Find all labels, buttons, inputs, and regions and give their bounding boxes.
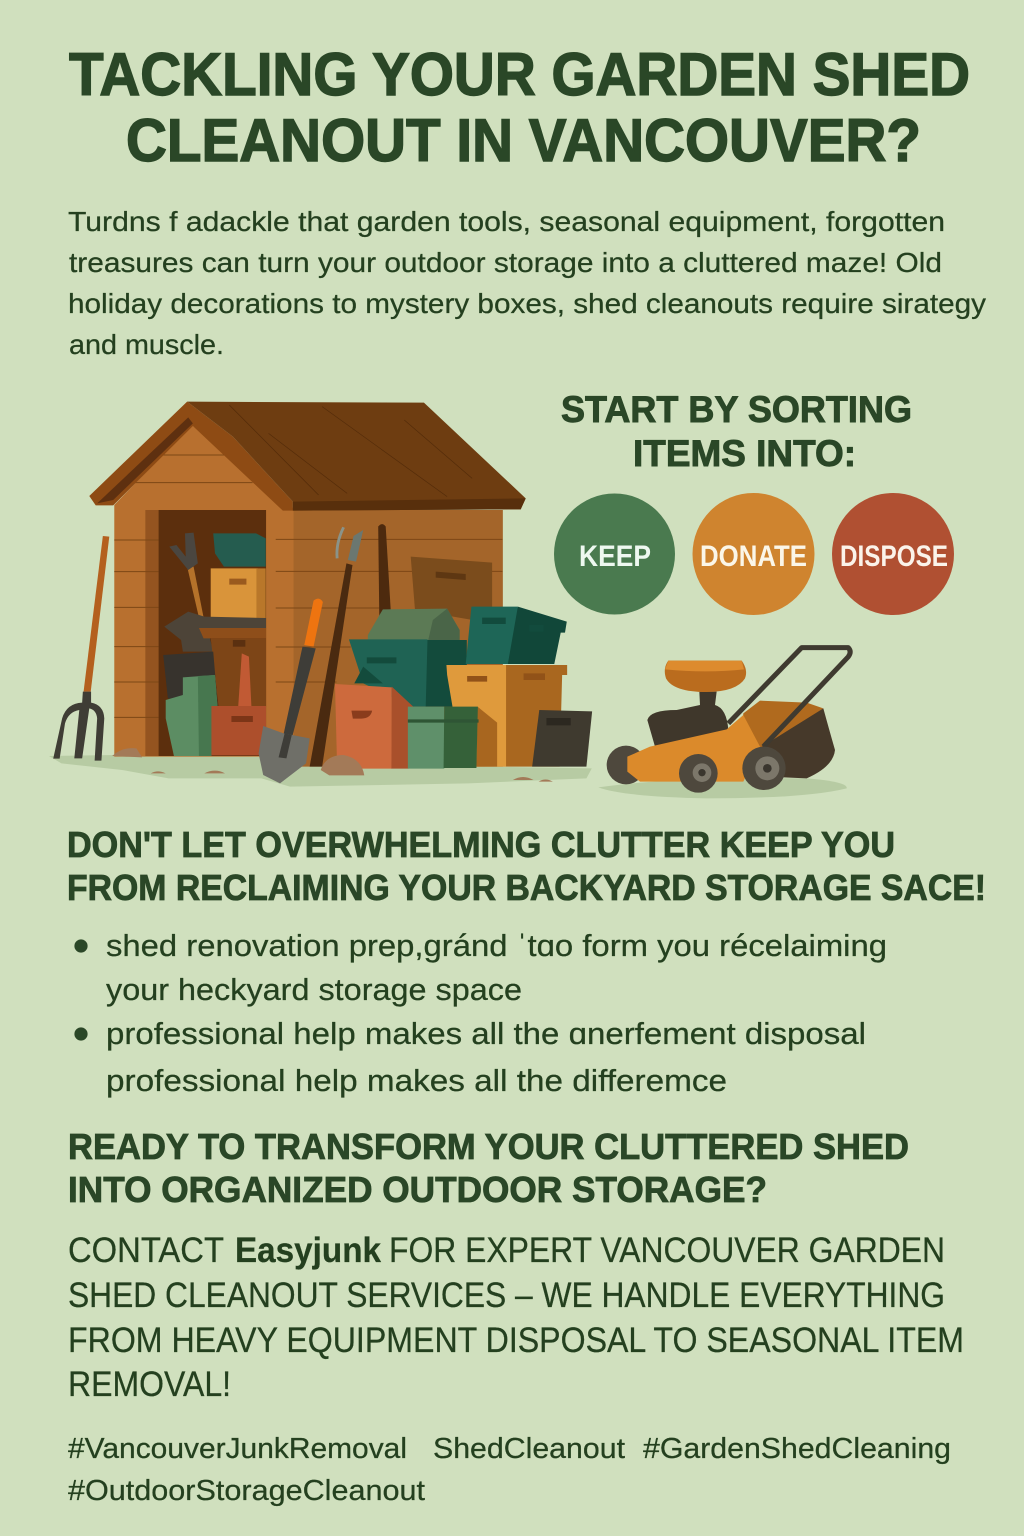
siding lines xyxy=(114,455,502,717)
heading: ready to transform: READY TO TRANSFORM YOUR CLUTTERED SHED xyxy=(68,1126,909,1167)
shed front wall xyxy=(114,425,294,757)
badge: keep xyxy=(554,494,675,614)
grass bag xyxy=(740,701,823,757)
heading: start by sorting xyxy=(561,389,912,474)
intro paragraph: holiday decorations to mystery boxes, shed cleanouts require sirategy xyxy=(68,288,986,319)
bullet list: professional help makes all the differemce xyxy=(106,1063,727,1098)
illustration: lawn mower xyxy=(598,648,850,798)
heading: don't let clutter xyxy=(67,824,986,908)
heading: ready to transform: INTO ORGANIZED OUTDOOR STORAGE? xyxy=(68,1169,767,1210)
hashtags: #OutdoorStorageCleanout xyxy=(68,1475,425,1507)
handle xyxy=(728,648,850,747)
contact text: Easyjunk xyxy=(235,1231,381,1270)
contact text: CONTACT xyxy=(68,1231,224,1270)
badge: donate xyxy=(692,493,814,615)
bullet list: your heckyard storage space xyxy=(106,972,522,1007)
deck xyxy=(627,715,760,782)
intro paragraph: treasures can turn your outdoor storage into a cluttered maze! Old xyxy=(69,247,942,278)
badge: dispose xyxy=(832,493,954,615)
leaning brown box xyxy=(411,557,492,623)
bullet list: shed renovation prep,gránd ˈtɑo form you récelaiming xyxy=(106,928,887,963)
contact text xyxy=(68,1231,964,1404)
contact text: SHED CLEANOUT SERVICES – WE HANDLE EVERYTHING xyxy=(68,1276,945,1315)
title: CLEANOUT IN VANCOUVER? xyxy=(126,107,921,174)
items in doorway xyxy=(213,533,266,567)
intro paragraph: Turdns f adackle that garden tools, seasonal equipment, forgotten xyxy=(68,206,945,237)
heading: don't let clutter: DON'T LET OVERWHELMING CLUTTER KEEP YOU xyxy=(67,824,895,865)
pitchfork xyxy=(84,536,109,692)
hashtags: #VancouverJunkRemoval xyxy=(68,1433,407,1465)
hashtags: #GardenShedCleaning xyxy=(643,1433,951,1465)
contact text: FOR EXPERT VANCOUVER GARDEN xyxy=(389,1231,945,1270)
hashtags xyxy=(68,1433,951,1507)
badge: keep: KEEP xyxy=(579,540,651,573)
title xyxy=(69,41,970,174)
heading: ready to transform xyxy=(68,1126,909,1210)
doorway xyxy=(159,510,266,756)
engine xyxy=(647,692,728,747)
ground shadow xyxy=(49,755,592,787)
heading: start by sorting: ITEMS INTO: xyxy=(633,433,856,474)
shed side wall xyxy=(293,510,503,767)
left wheel xyxy=(607,746,645,784)
illustration: shed with clutter xyxy=(49,402,592,787)
badge: dispose: DISPOSE xyxy=(840,540,948,573)
intro paragraph: and muscle. xyxy=(69,329,224,360)
intro paragraph xyxy=(68,206,986,360)
shovel xyxy=(304,599,323,647)
heading: don't let clutter: FROM RECLAIMING YOUR BACKYARD STORAGE SACE! xyxy=(67,867,986,908)
stacked boxes xyxy=(368,609,460,643)
bullet list: professional help makes all the ɑnerfement disposal xyxy=(106,1016,866,1051)
badge: donate: DONATE xyxy=(700,540,807,573)
contact text: FROM HEAVY EQUIPMENT DISPOSAL TO SEASONAL ITEM xyxy=(68,1321,964,1360)
hashtags: ShedCleanout xyxy=(433,1433,625,1465)
contact text: REMOVAL! xyxy=(68,1365,231,1404)
bullet list xyxy=(74,928,887,1098)
roof fascia xyxy=(89,402,293,511)
rake handle on wall xyxy=(378,524,391,617)
title: TACKLING YOUR GARDEN SHED xyxy=(69,41,970,108)
heading: start by sorting: START BY SORTING xyxy=(561,389,912,430)
rocks xyxy=(321,755,364,775)
seat/cap xyxy=(665,661,746,692)
wheels xyxy=(742,747,786,790)
mower ground shadow xyxy=(598,778,847,798)
roof xyxy=(187,402,526,511)
